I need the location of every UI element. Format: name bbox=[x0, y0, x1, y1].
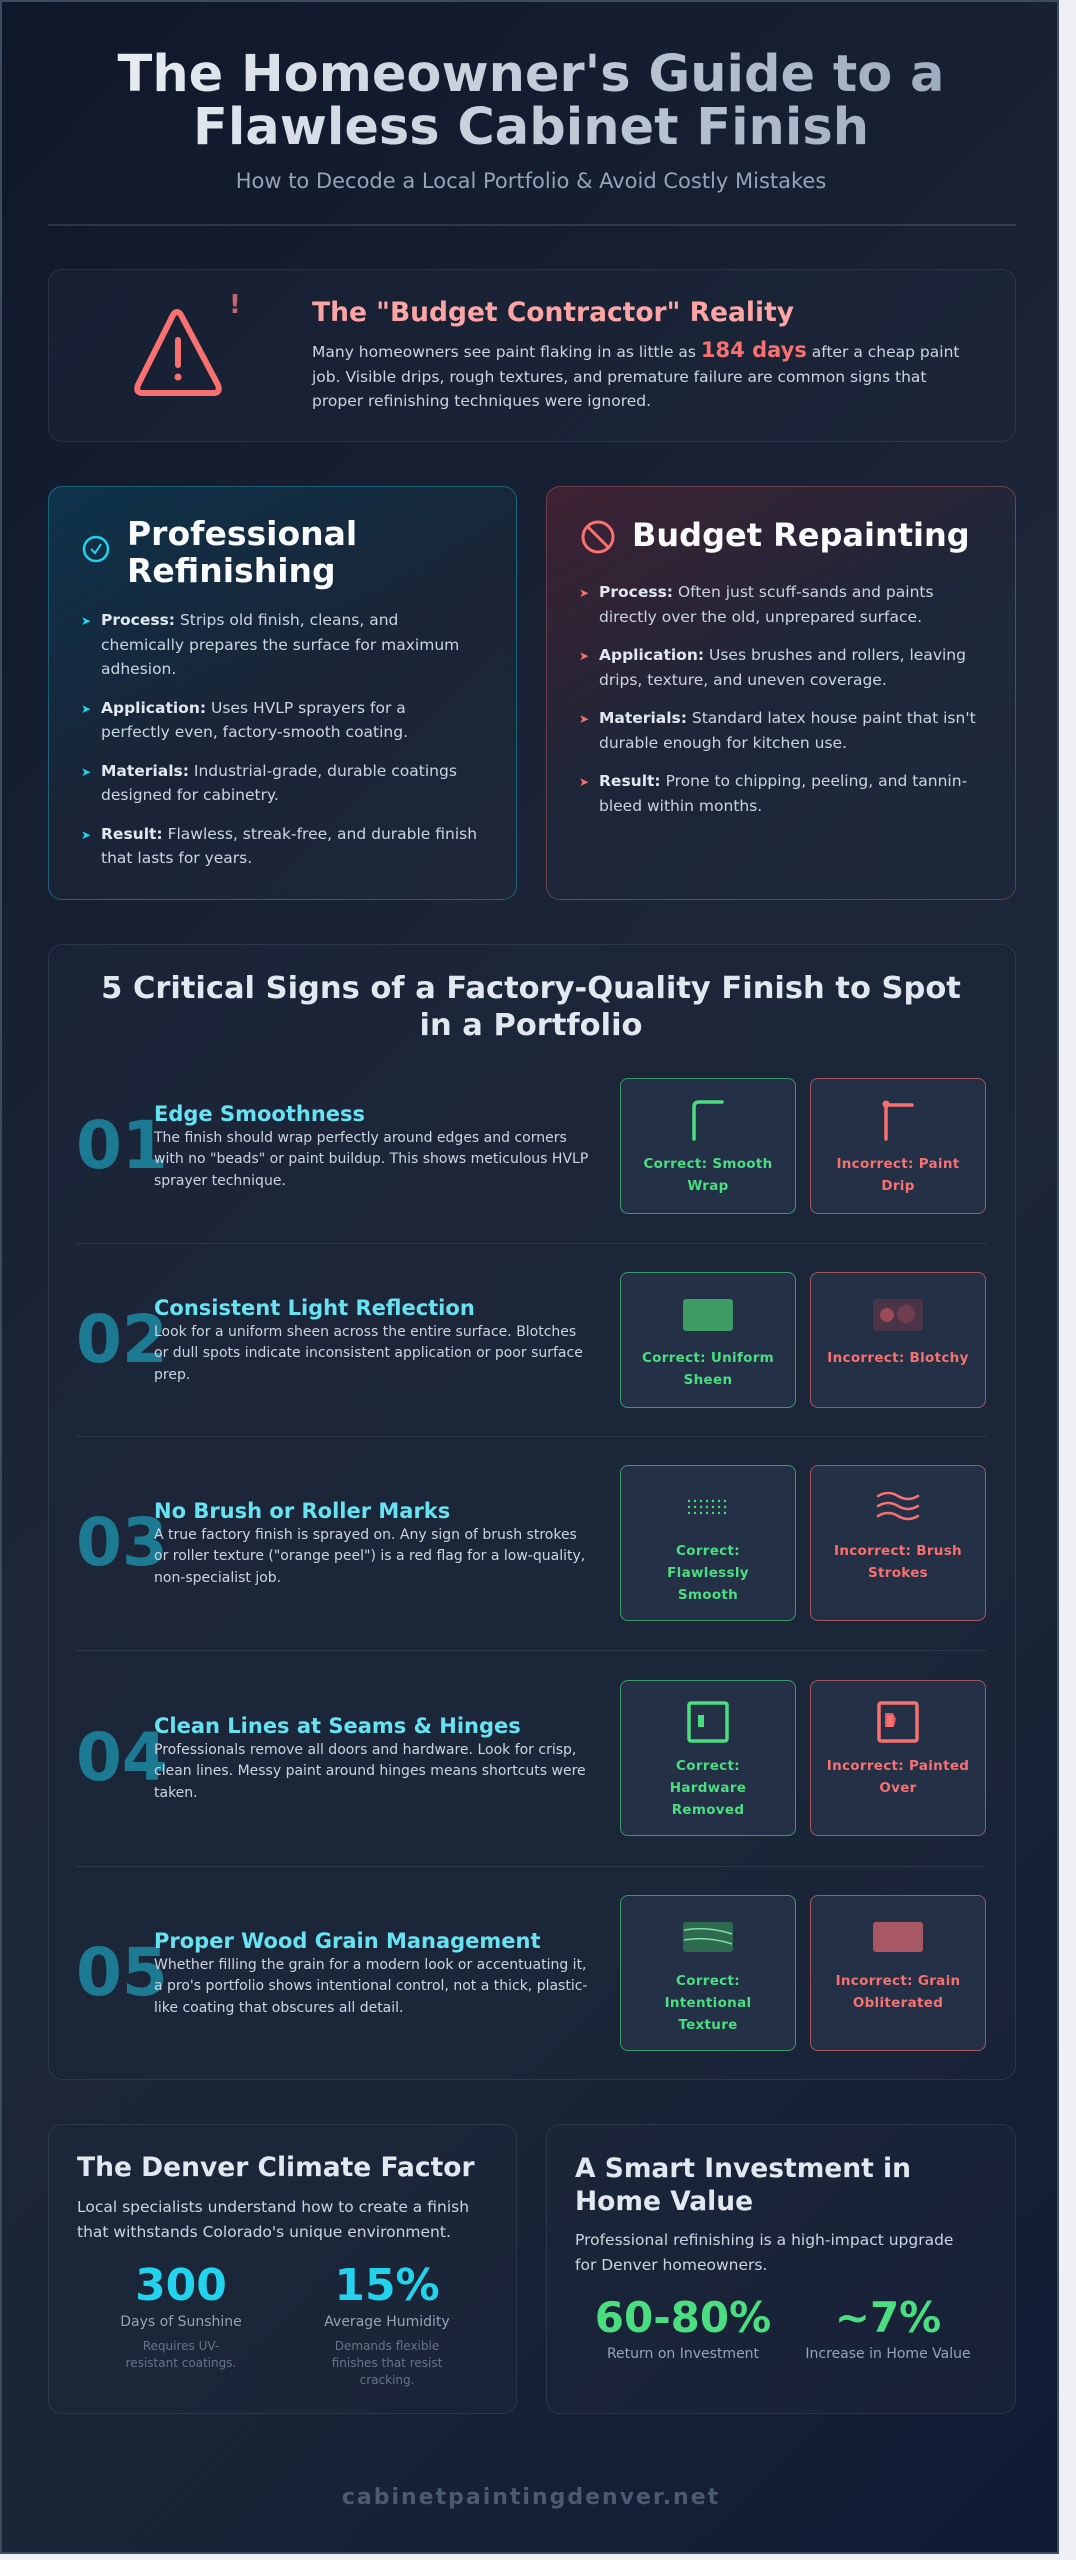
heading: Home Value bbox=[575, 2186, 753, 2217]
row 04: taken. bbox=[154, 1785, 198, 1801]
stat: 15%: Average Humidity bbox=[324, 2314, 450, 2330]
row 04: Clean Lines at Seams & Hinges bbox=[154, 1714, 521, 1738]
heading: The "Budget Contractor" Reality bbox=[312, 297, 794, 328]
heading: Professional bbox=[127, 514, 357, 553]
box: incorrect blotchy bbox=[810, 1272, 986, 1408]
row 04: 04 bbox=[76, 1719, 168, 1796]
box: correct intentional texture: Intentional bbox=[665, 1995, 751, 2011]
list: adhesion. bbox=[101, 660, 176, 678]
box: incorrect grain obliterated bbox=[810, 1895, 986, 2051]
box: incorrect painted over bbox=[810, 1680, 986, 1836]
list: directly over the old, unprepared surface. bbox=[599, 608, 922, 626]
list bbox=[579, 583, 976, 814]
panel: professional refinishing: ➤ bbox=[81, 614, 91, 628]
box: incorrect brush strokes: Strokes bbox=[868, 1565, 928, 1581]
box: incorrect paint drip: Incorrect: Paint bbox=[836, 1156, 960, 1172]
row 02: 02 bbox=[76, 1301, 168, 1378]
text block: job. Visible drips, rough textures, and premature failure are common signs that bbox=[312, 368, 926, 386]
stat: roi: 60-80% bbox=[595, 2293, 771, 2342]
panel: professional refinishing: ➤ bbox=[81, 828, 91, 842]
panel: budget repainting: ➤ bbox=[579, 712, 589, 726]
heading: Budget Repainting bbox=[632, 516, 970, 554]
title: The Homeowner's Guide to a bbox=[118, 45, 944, 104]
box: correct hardware removed: Correct: bbox=[676, 1758, 740, 1774]
row 01 bbox=[76, 1102, 588, 1189]
stat: 300 bbox=[120, 2260, 242, 2370]
row 03: 03 bbox=[76, 1504, 168, 1581]
text block: for Denver homeowners. bbox=[575, 2256, 767, 2274]
row 02: or dull spots indicate inconsistent application or poor surface bbox=[154, 1345, 583, 1361]
row 03: No Brush or Roller Marks bbox=[154, 1499, 450, 1523]
row 01: sprayer technique. bbox=[154, 1173, 286, 1189]
box: correct intentional texture bbox=[620, 1895, 796, 2051]
box: incorrect painted over: Over bbox=[879, 1780, 917, 1796]
box: incorrect paint drip bbox=[810, 1078, 986, 1214]
stat: 15%: 15% bbox=[334, 2260, 440, 2311]
list: chemically prepares the surface for maximum bbox=[101, 636, 459, 654]
box: correct uniform sheen bbox=[620, 1272, 796, 1408]
box: correct uniform sheen: Sheen bbox=[684, 1372, 732, 1388]
list: Application: Uses brushes and rollers, leaving bbox=[599, 646, 966, 664]
row 05 bbox=[76, 1929, 587, 2016]
text block bbox=[575, 2231, 953, 2274]
box: correct flawlessly smooth: Correct: bbox=[676, 1543, 740, 1559]
row 05: Whether filling the grain for a modern look or accentuating it, bbox=[154, 1957, 587, 1973]
panel: professional refinishing: ➤ bbox=[81, 702, 91, 716]
list: Result: Prone to chipping, peeling, and tannin- bbox=[599, 772, 967, 790]
list: Materials: Industrial-grade, durable coatings bbox=[101, 762, 457, 780]
icon: exclamation: ! bbox=[229, 290, 241, 320]
row 02 bbox=[76, 1296, 583, 1383]
footer: cabinetpaintingdenver.net bbox=[342, 2485, 720, 2510]
row 03: A true factory finish is sprayed on. Any sign of brush strokes bbox=[154, 1527, 577, 1543]
panel: 5 critical signs bbox=[48, 944, 1016, 2080]
box: correct flawlessly smooth bbox=[620, 1465, 796, 1621]
box: incorrect grain obliterated: Obliterated bbox=[853, 1995, 943, 2011]
list: that lasts for years. bbox=[101, 849, 252, 867]
row 05: 05 bbox=[76, 1934, 168, 2011]
heading bbox=[575, 2153, 911, 2217]
row 01: Edge Smoothness bbox=[154, 1102, 365, 1126]
list: Process: Strips old finish, cleans, and bbox=[101, 611, 398, 629]
box: correct hardware removed: Removed bbox=[672, 1802, 744, 1818]
stat: 15% bbox=[324, 2260, 450, 2387]
panel: smart investment bbox=[546, 2124, 1016, 2414]
stat: 15%: Demands flexible finishes that resist cracking. bbox=[332, 2339, 442, 2387]
box: correct smooth wrap: Correct: Smooth bbox=[643, 1156, 773, 1172]
text block: Many homeowners see paint flaking in as little as 184 days after a cheap paint bbox=[312, 338, 959, 362]
list: perfectly even, factory-smooth coating. bbox=[101, 723, 408, 741]
icon: warning triangle bbox=[134, 309, 222, 396]
box: incorrect brush strokes: Incorrect: Brush bbox=[834, 1543, 962, 1559]
stat: 300: 300 bbox=[135, 2260, 227, 2311]
row 05: a pro's portfolio shows intentional control, not a thick, plastic- bbox=[154, 1978, 587, 1994]
row 04: clean lines. Messy paint around hinges means shortcuts were bbox=[154, 1763, 586, 1779]
heading: The Denver Climate Factor bbox=[77, 2152, 475, 2183]
section heading: in a Portfolio bbox=[419, 1008, 642, 1043]
row 03 bbox=[76, 1499, 585, 1586]
row 05: Proper Wood Grain Management bbox=[154, 1929, 541, 1953]
list: Process: Often just scuff-sands and paints bbox=[599, 583, 934, 601]
section heading bbox=[101, 971, 961, 1043]
box: correct flawlessly smooth: Flawlessly bbox=[667, 1565, 749, 1581]
stat: home value bbox=[805, 2293, 971, 2362]
box: correct smooth wrap: Wrap bbox=[687, 1178, 729, 1194]
list: Result: Flawless, streak-free, and durable finish bbox=[101, 824, 477, 842]
heading bbox=[127, 514, 357, 590]
panel: budget repainting: ➤ bbox=[579, 586, 589, 600]
panel: professional refinishing: ➤ bbox=[81, 764, 91, 778]
stat: roi: Return on Investment bbox=[607, 2346, 759, 2362]
text block: Local specialists understand how to create a finish bbox=[77, 2198, 469, 2216]
row 02: Look for a uniform sheen across the entire surface. Blotches bbox=[154, 1324, 576, 1340]
panel: denver climate factor bbox=[48, 2124, 517, 2414]
box: correct hardware removed bbox=[620, 1680, 796, 1836]
box: incorrect grain obliterated: Incorrect: Grain bbox=[836, 1973, 960, 1989]
panel: professional refinishing bbox=[48, 486, 517, 900]
box: correct intentional texture: Correct: bbox=[676, 1973, 740, 1989]
icon: check circle bbox=[82, 536, 110, 562]
list: Materials: Standard latex house paint that isn't bbox=[599, 709, 976, 727]
heading: A Smart Investment in bbox=[575, 2153, 911, 2184]
title bbox=[2, 48, 1060, 154]
box: incorrect blotchy: Incorrect: Blotchy bbox=[827, 1350, 969, 1366]
row 01: 01 bbox=[76, 1107, 168, 1184]
title: Flawless Cabinet Finish bbox=[193, 98, 869, 157]
row 04: Professionals remove all doors and hardware. Look for crisp, bbox=[154, 1742, 576, 1758]
stat: 300: Requires UV-resistant coatings. bbox=[126, 2339, 236, 2370]
row 04 bbox=[76, 1714, 586, 1801]
box: incorrect brush strokes bbox=[810, 1465, 986, 1621]
stat: home value: ~7% bbox=[835, 2293, 941, 2342]
box: correct smooth wrap bbox=[620, 1078, 796, 1214]
list: designed for cabinetry. bbox=[101, 786, 279, 804]
row 01: The finish should wrap perfectly around edges and corners bbox=[154, 1130, 567, 1146]
list: durable enough for kitchen use. bbox=[599, 734, 847, 752]
row 03: or roller texture ("orange peel") is a red flag for a low-quality, bbox=[154, 1548, 585, 1564]
stat: home value: Increase in Home Value bbox=[805, 2346, 971, 2362]
text block: proper refinishing techniques were ignored. bbox=[312, 392, 651, 410]
box: correct hardware removed: Hardware bbox=[670, 1780, 746, 1796]
stat: 300: Days of Sunshine bbox=[120, 2314, 242, 2330]
icon: prohibited bbox=[582, 520, 614, 554]
row 03: non-specialist job. bbox=[154, 1570, 281, 1586]
list: drips, texture, and uneven coverage. bbox=[599, 670, 887, 688]
box: correct uniform sheen: Correct: Uniform bbox=[642, 1350, 774, 1366]
row 01: with no "beads" or paint buildup. This shows meticulous HVLP bbox=[154, 1151, 588, 1167]
text block: Professional refinishing is a high-impact upgrade bbox=[575, 2231, 953, 2249]
list bbox=[81, 611, 477, 867]
row 02: Consistent Light Reflection bbox=[154, 1296, 475, 1320]
list: bleed within months. bbox=[599, 796, 762, 814]
text block: that withstands Colorado's unique environment. bbox=[77, 2223, 451, 2241]
panel: budget repainting: ➤ bbox=[579, 649, 589, 663]
list: Application: Uses HVLP sprayers for a bbox=[101, 698, 406, 716]
subtitle: How to Decode a Local Portfolio & Avoid Costly Mistakes bbox=[236, 169, 826, 193]
row 05: like coating that obscures all detail. bbox=[154, 2000, 404, 2016]
text block bbox=[312, 338, 960, 410]
box: correct flawlessly smooth: Smooth bbox=[678, 1587, 738, 1603]
panel: budget repainting: ➤ bbox=[579, 775, 589, 789]
box: incorrect painted over: Incorrect: Painted bbox=[827, 1758, 969, 1774]
section heading: 5 Critical Signs of a Factory-Quality Finish to Spot bbox=[101, 971, 961, 1006]
panel: budget repainting bbox=[546, 486, 1016, 900]
box: incorrect paint drip: Drip bbox=[881, 1178, 915, 1194]
heading: Refinishing bbox=[127, 551, 336, 590]
row 02: prep. bbox=[154, 1367, 190, 1383]
panel: budget contractor reality bbox=[48, 269, 1016, 442]
text block bbox=[77, 2198, 469, 2241]
box: correct intentional texture: Texture bbox=[678, 2017, 738, 2033]
